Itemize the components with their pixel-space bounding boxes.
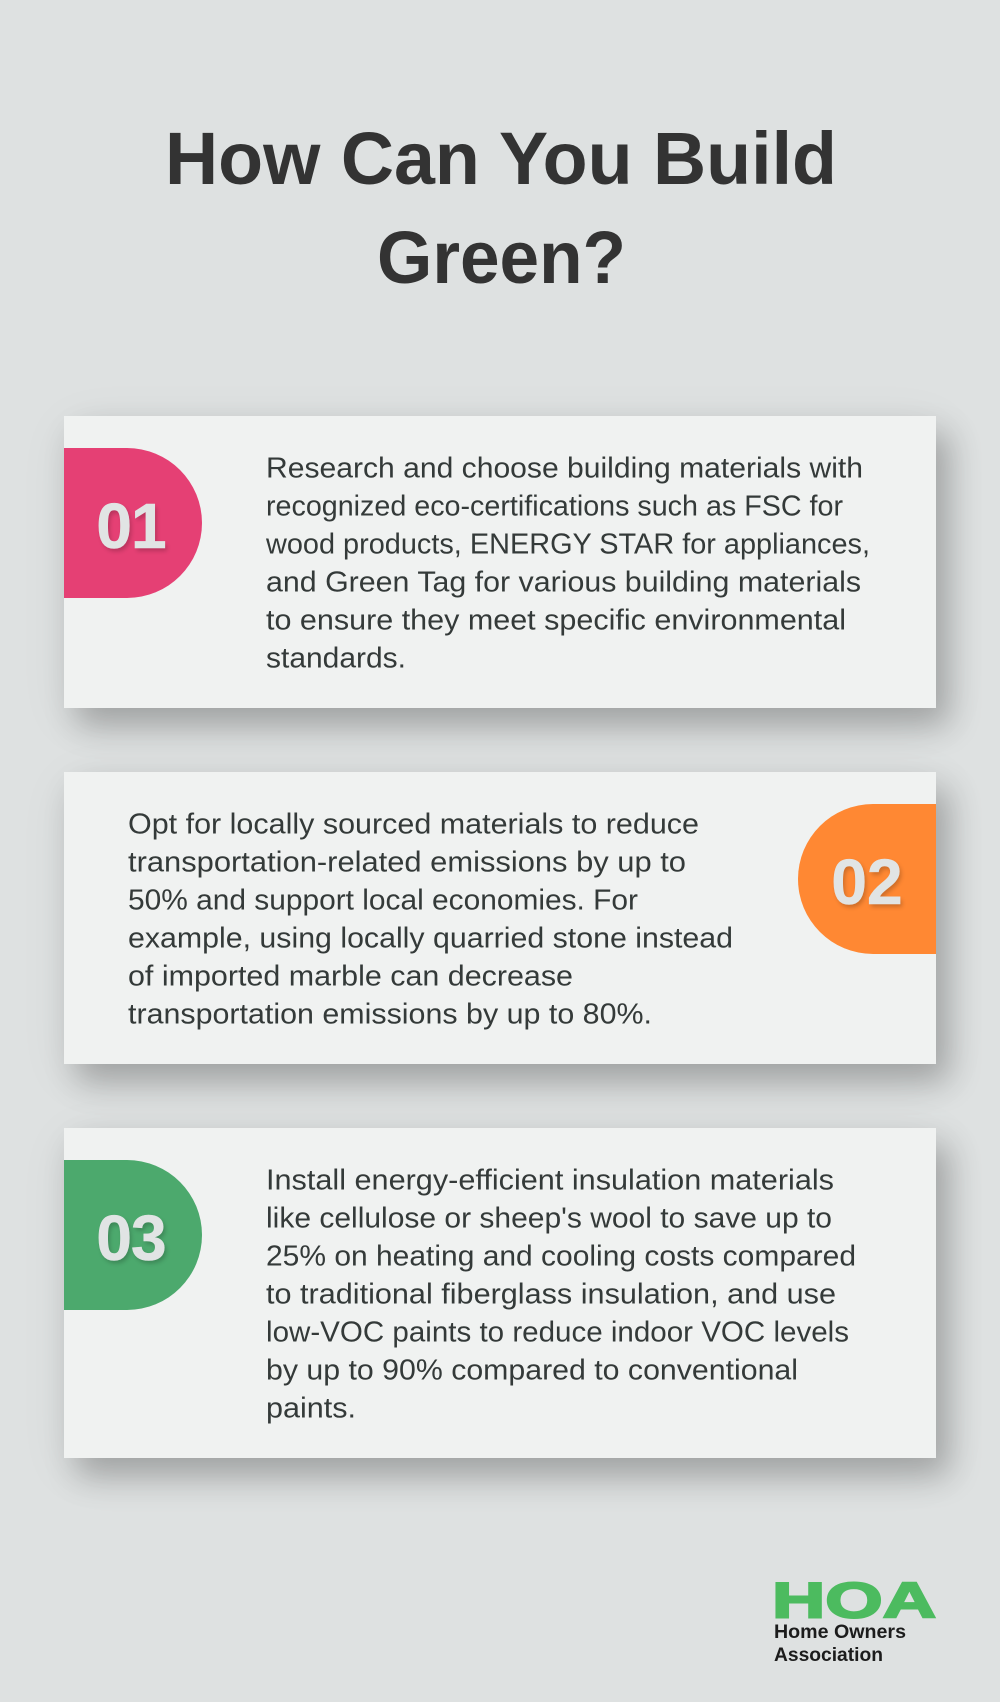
title: How Can You Build — [165, 117, 837, 200]
text: step 03 description: paints. — [266, 1392, 356, 1424]
text: step 02 description: of imported marble can decrease — [128, 960, 573, 992]
text: step 01 description: wood products, ENERGY STAR for appliances, — [265, 528, 870, 560]
text: step 01 description: to ensure they meet specific environmental — [266, 604, 846, 636]
text: step 03 description: like cellulose or sheep's wool to save up to — [266, 1202, 832, 1234]
text: step 01 description: Research and choose building materials with — [266, 452, 863, 484]
panel: step 01 — [64, 416, 936, 708]
panel: step 02 — [64, 772, 936, 1064]
text: step 02 description: example, using locally quarried stone instead — [128, 922, 733, 954]
text: step 02 description: Opt for locally sourced materials to reduce — [128, 808, 699, 840]
logo: HOA Home Owners Association — [772, 1572, 936, 1666]
text: step 02 description: 50% and support local economies. For — [128, 884, 639, 916]
logo: HOA Home Owners Association: Association — [774, 1645, 883, 1666]
title: Green? — [377, 216, 626, 299]
text: step 03 description: by up to 90% compared to conventional — [266, 1354, 798, 1386]
text: step 02 description: transportation emissions by up to 80%. — [128, 998, 652, 1030]
text: step 03 description: 25% on heating and cooling costs compared — [266, 1240, 856, 1272]
badge: 02: 02 — [831, 846, 903, 918]
text: step 03 description: low-VOC paints to reduce indoor VOC levels — [266, 1316, 849, 1348]
title — [165, 117, 837, 299]
text: step 02 description: transportation-related emissions by up to — [128, 846, 686, 878]
text: step 01 description: and Green Tag for various building materials — [266, 566, 861, 598]
panel: step 03 — [64, 1128, 936, 1458]
text: step 01 description — [265, 452, 870, 674]
logo: HOA Home Owners Association: HOA — [772, 1572, 936, 1628]
badge: 02 — [798, 804, 936, 954]
text: step 01 description: recognized eco-certifications such as FSC for — [266, 490, 843, 522]
badge: 01 — [64, 448, 202, 598]
text: step 03 description: to traditional fiberglass insulation, and use — [266, 1278, 836, 1310]
text: step 03 description: Install energy-efficient insulation materials — [266, 1164, 834, 1196]
logo: HOA Home Owners Association: Home Owners — [774, 1622, 906, 1643]
text: step 03 description — [266, 1164, 856, 1424]
badge: 01: 01 — [96, 490, 166, 562]
badge: 03 — [64, 1160, 202, 1310]
text: step 02 description — [128, 808, 733, 1030]
text: step 01 description: standards. — [266, 642, 406, 674]
badge: 03: 03 — [96, 1202, 166, 1274]
